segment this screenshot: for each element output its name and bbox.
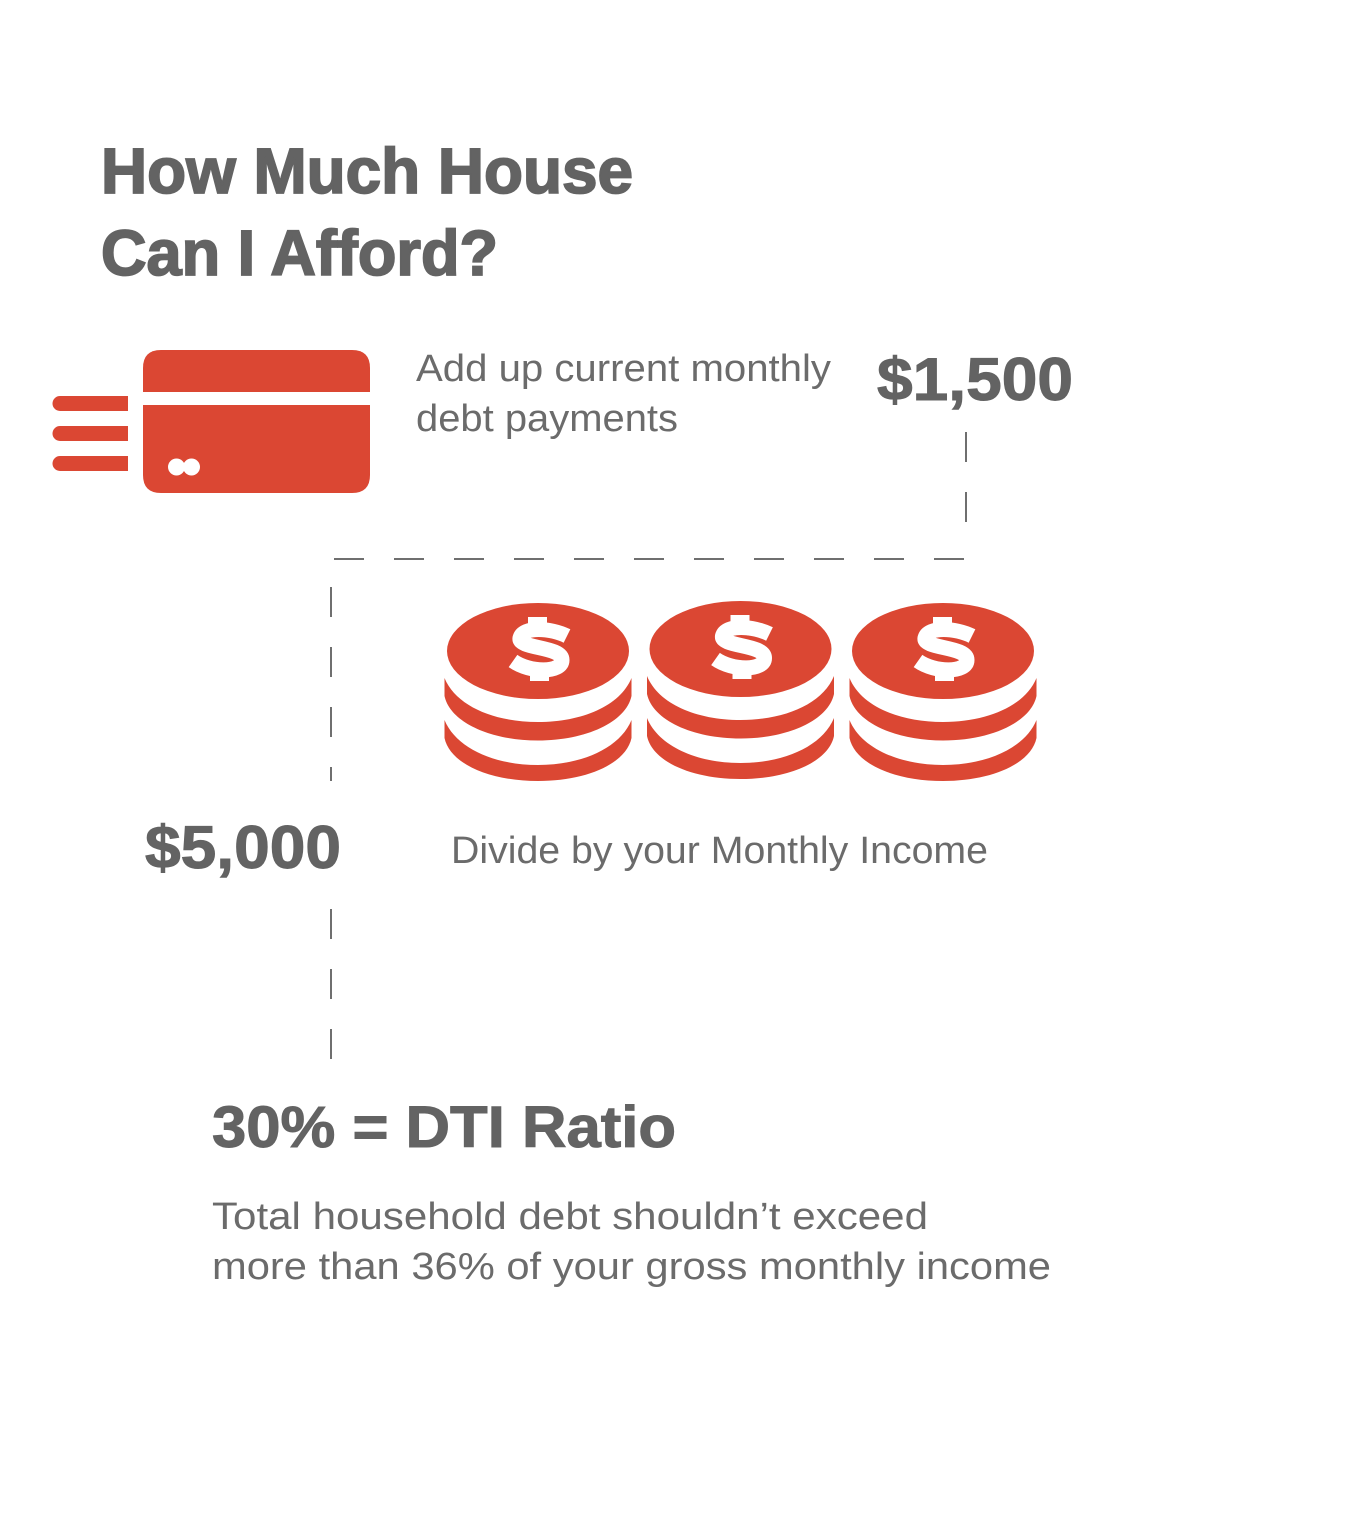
heading: DTI ratio: 30% = DTI Ratio — [212, 1095, 676, 1160]
dashed connector: debt to income — [331, 432, 966, 781]
icon: credit card — [52, 350, 370, 493]
text: add up debt payments: Add up current monthly — [416, 348, 831, 390]
amount: $5,000: $5,000 — [145, 814, 341, 881]
title: Can I Afford? — [101, 217, 498, 289]
text: household debt guidance: more than 36% of your gross monthly income — [212, 1246, 1051, 1288]
title — [101, 135, 633, 289]
icon: three coin stacks — [444, 601, 1036, 781]
amount: $1,500: $1,500 — [877, 346, 1073, 413]
dashed connector: income to ratio — [330, 909, 332, 1059]
text: divide by monthly income: Divide by your Monthly Income — [451, 830, 988, 872]
title: How Much House — [101, 135, 633, 207]
text: add up debt payments — [416, 348, 831, 440]
text: household debt guidance: Total household debt shouldn’t exceed — [212, 1196, 928, 1238]
text: household debt guidance — [212, 1196, 1051, 1288]
text: add up debt payments: debt payments — [416, 398, 678, 440]
